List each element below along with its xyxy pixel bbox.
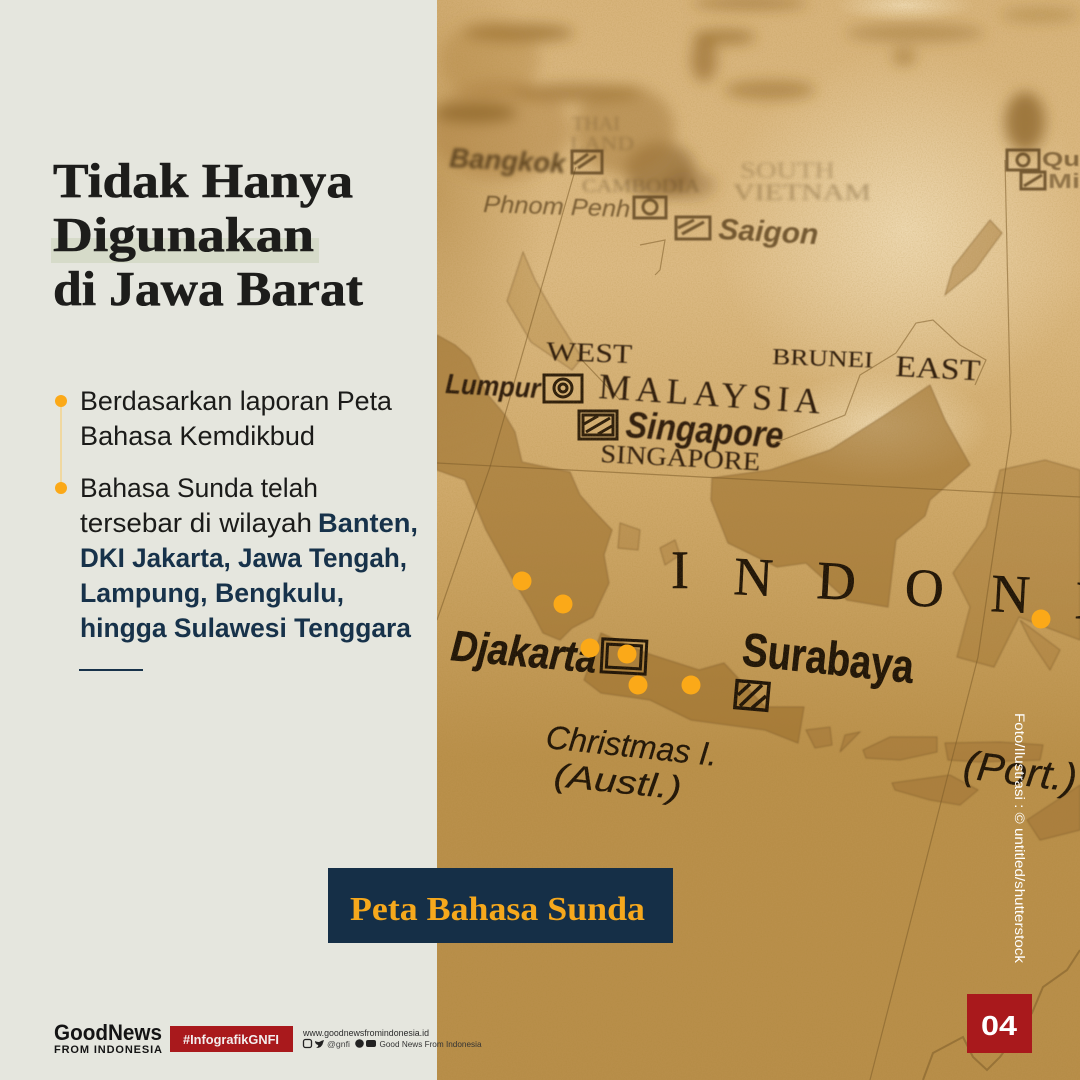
icon: instagram — [304, 1040, 312, 1048]
labels: Malaysia area: EAST — [895, 350, 981, 387]
divider line — [79, 669, 143, 671]
title — [51, 153, 364, 316]
footer contact info: Good News From Indonesia — [380, 1039, 482, 1049]
labels: Indonesia and Java area: (Port.) — [961, 743, 1079, 801]
title: di Jawa Barat — [53, 261, 364, 316]
labels: Malaysia area — [445, 336, 981, 476]
labels: Indonesia and Java area: (Austl.) — [552, 756, 683, 806]
text block: bullet two: tersebar di wilayah — [80, 508, 312, 538]
text block: bullet one — [80, 386, 393, 451]
photo credit: Foto/Ilustrasi : © untitled/shutterstock — [1012, 713, 1027, 963]
text block: bullet two — [80, 473, 418, 643]
title: Digunakan — [53, 207, 314, 262]
labels: Malaysia area: SINGAPORE — [600, 439, 761, 476]
text block: bullet two: Lampung, Bengkulu, — [80, 578, 344, 608]
icon: twitter — [315, 1040, 324, 1048]
labels: blurred northern places: SOUTH — [740, 158, 835, 183]
labels: Malaysia area: BRUNEI — [772, 344, 874, 373]
labels: blurred northern places: Mi — [1048, 171, 1080, 193]
labels: Malaysia area: MALAYSIA — [597, 366, 822, 421]
labels: blurred northern places — [449, 113, 1080, 251]
footer contact info: @gnfi — [327, 1039, 350, 1049]
labels: blurred northern places: Qu — [1042, 149, 1080, 171]
labels: blurred northern places: Phnom Penh — [483, 191, 631, 223]
text block: bullet one: Bahasa Kemdikbud — [80, 421, 315, 451]
icon: facebook — [355, 1039, 364, 1048]
labels: Indonesia and Java area: O — [903, 557, 945, 619]
labels: Indonesia and Java area: Djakarta — [449, 622, 599, 683]
labels: Indonesia and Java area: N — [989, 563, 1031, 625]
labels: blurred northern places: VIETNAM — [733, 180, 871, 205]
page number: 04 — [981, 1010, 1017, 1041]
text block: bullet one: Berdasarkan laporan Peta — [80, 386, 393, 416]
panel: left background — [0, 0, 437, 1080]
footer contact info: www.goodnewsfromindonesia.id — [302, 1028, 429, 1038]
icons: Java city markers — [601, 639, 769, 710]
footer logo: FROM INDONESIA — [54, 1044, 162, 1056]
labels: Indonesia and Java area: D — [815, 550, 857, 612]
text block: bullet two: DKI Jakarta, Jawa Tengah, — [80, 543, 407, 573]
icons: Malaysia city markers — [544, 375, 617, 439]
icon: youtube — [366, 1040, 376, 1047]
map land masses — [437, 220, 1080, 840]
labels: blurred northern places: Saigon — [718, 213, 819, 251]
labels: Malaysia area: WEST — [546, 336, 633, 369]
text block: bullet two: hingga Sulawesi Tenggara — [80, 613, 412, 643]
blurred top map shading — [430, 0, 1080, 199]
labels: Malaysia area: Lumpur — [445, 368, 543, 404]
bullet timeline — [55, 395, 67, 494]
noise texture — [437, 0, 1080, 1080]
labels: Indonesia and Java area: I — [671, 540, 689, 600]
labels: blurred northern places: CAMBODIA — [582, 176, 700, 197]
footer hashtag badge — [170, 1026, 293, 1052]
labels: Indonesia and Java area: Christmas I. — [544, 718, 719, 773]
footer hashtag badge: #InfografikGNFI — [183, 1032, 279, 1047]
icons: blurred city markers — [572, 150, 1045, 239]
labels: Indonesia and Java area: N — [732, 546, 774, 608]
caption box: Peta Bahasa Sunda — [328, 868, 673, 943]
text block: bullet two: Bahasa Sunda telah — [80, 473, 318, 503]
footer contact info — [302, 1028, 482, 1049]
page number — [967, 994, 1032, 1053]
footer logo — [54, 1020, 162, 1056]
map dots: Sundanese language locations — [512, 572, 1050, 694]
text block: bullet two: Banten, — [318, 508, 418, 538]
footer logo: GoodNews — [54, 1020, 162, 1045]
labels: Indonesia and Java area — [449, 540, 1080, 806]
title: Tidak Hanya — [53, 153, 353, 208]
panel: map photo background — [430, 0, 1080, 1080]
labels: blurred northern places: LAND — [570, 133, 634, 155]
labels: blurred northern places: Bangkok — [449, 142, 568, 179]
labels: Malaysia area: Singapore — [624, 404, 785, 456]
title highlight — [51, 238, 319, 263]
caption box: Peta Bahasa Sunda: Peta Bahasa Sunda — [350, 891, 645, 928]
labels: Indonesia and Java area: Surabaya — [740, 622, 917, 693]
map contour and grid lines — [437, 160, 1080, 1080]
labels: blurred northern places: THAI — [572, 113, 620, 135]
